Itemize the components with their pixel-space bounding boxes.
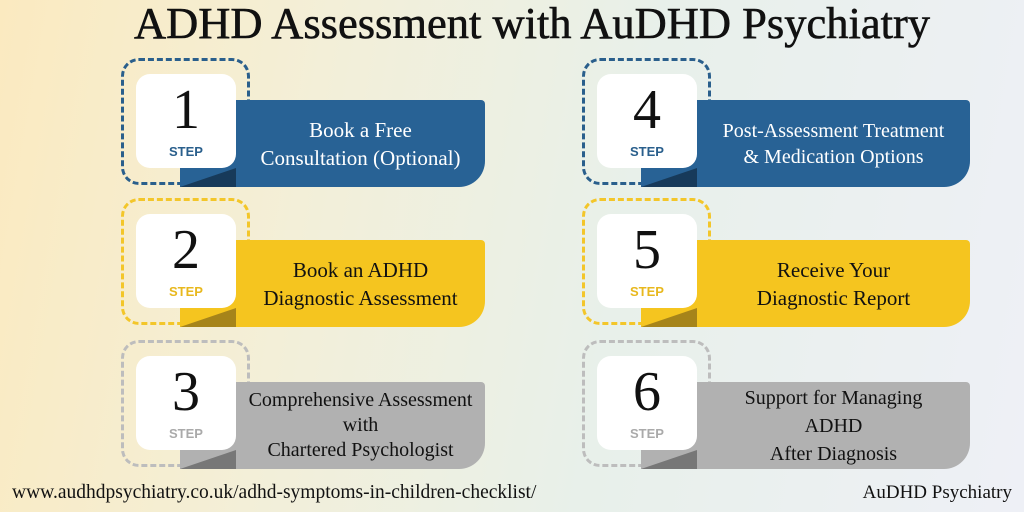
card: step 5: 5 [633,219,661,281]
card: step 6: After Diagnosis [770,442,897,464]
card: step 2: 2 [172,219,200,281]
card: step 5 [582,198,970,327]
footer brand: AuDHD Psychiatry [863,482,1012,503]
card: step 1 [121,58,485,187]
card: step 5: Receive Your [777,258,890,282]
card: step 1: Consultation (Optional) [260,146,461,170]
card: step 4: STEP [630,144,664,159]
card: step 3: with [343,414,378,436]
card: step 3: STEP [169,426,203,441]
card: step 2: STEP [169,284,203,299]
card: step 3: Comprehensive Assessment [249,389,472,411]
card: step 2: Diagnostic Assessment [263,286,458,310]
card: step 5: STEP [630,284,664,299]
card: step 6: Support for Managing [745,386,922,408]
card: step 3: Chartered Psychologist [267,439,454,461]
card: step 4: & Medication Options [744,146,923,168]
card: step 3 [121,340,485,469]
card: step 3: 3 [172,361,200,423]
card: step 4: Post-Assessment Treatment [723,120,944,142]
card: step 6: 6 [633,361,661,423]
card: step 6 [582,340,970,469]
card: step 2 [121,198,485,327]
card: step 5: Diagnostic Report [757,286,910,310]
card: step 4: 4 [633,79,661,141]
card: step 6: STEP [630,426,664,441]
card: step 1: 1 [172,79,200,141]
card: step 1: STEP [169,144,203,159]
card: step 6: ADHD [805,414,862,436]
card: step 2: Book an ADHD [293,258,428,282]
card: step 4 [582,58,970,187]
footer url: www.audhdpsychiatry.co.uk/adhd-symptoms-in-children-checklist/ [12,482,536,503]
card: step 1: Book a Free [309,118,412,142]
